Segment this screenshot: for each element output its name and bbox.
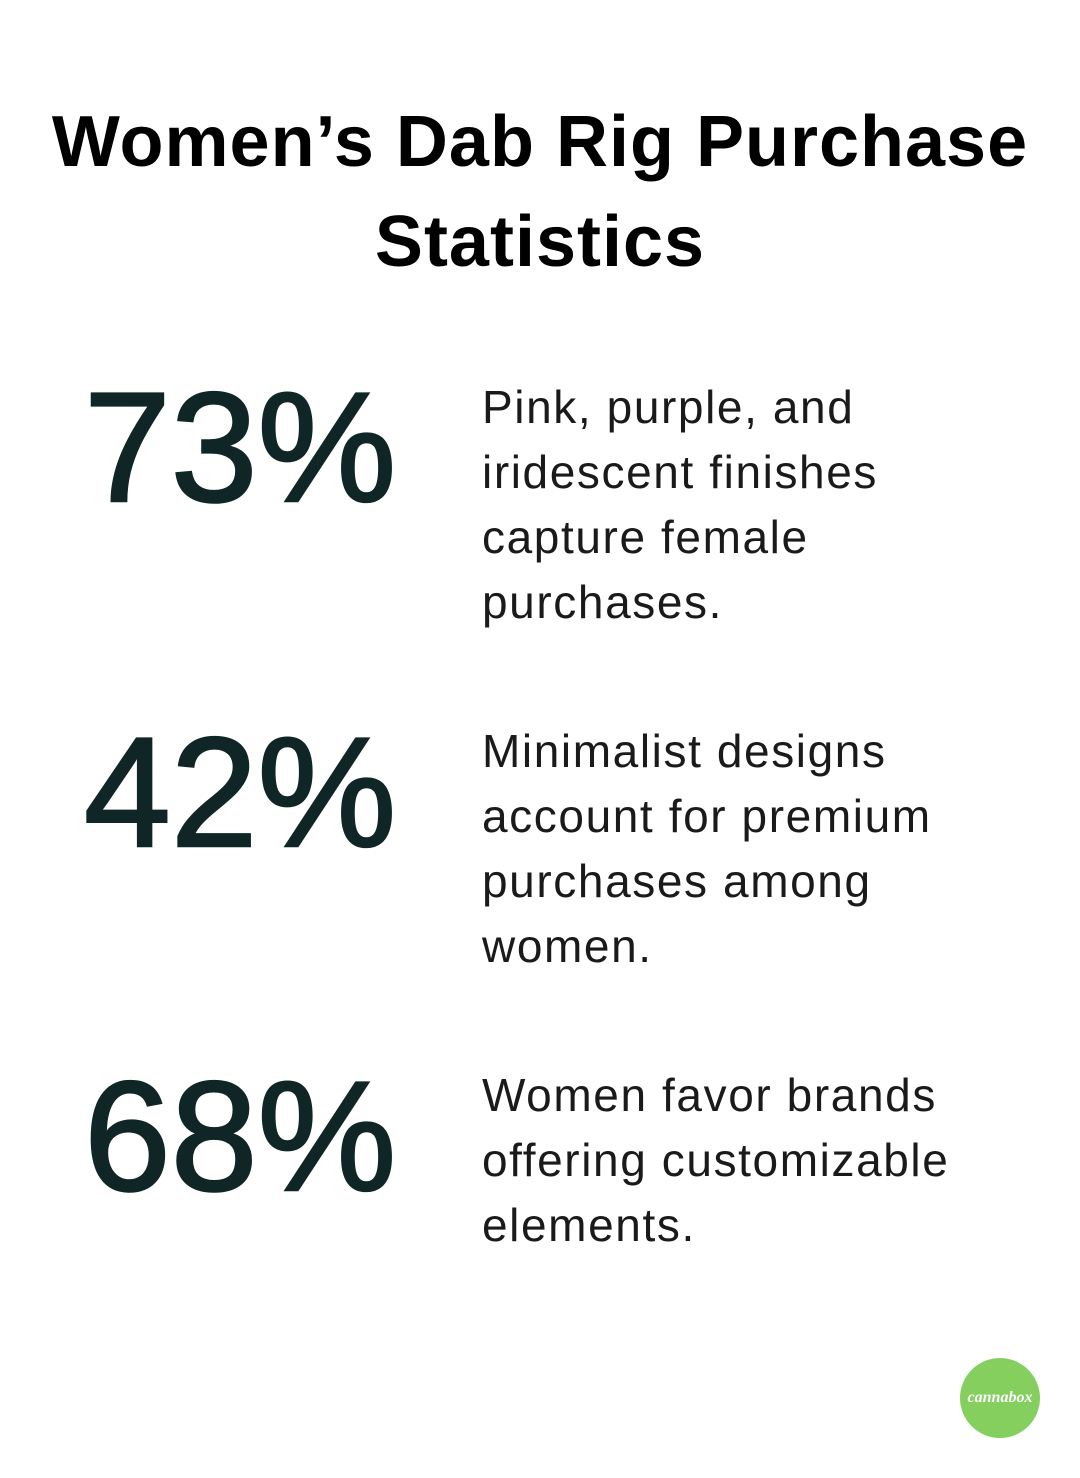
stat 2 number: 42% <box>84 706 396 880</box>
stat 1 number: 73% <box>84 361 396 535</box>
stat 3 text: Women favor brands <box>482 1069 937 1121</box>
stat 1 text: Pink, purple, and <box>482 381 854 433</box>
stat 1 text: iridescent finishes <box>482 446 878 498</box>
stat 3 text: offering customizable <box>482 1134 949 1186</box>
stat 2 text: Minimalist designs <box>482 725 887 777</box>
stat 3 number: 68% <box>84 1050 396 1224</box>
logo: cannabox: cannabox <box>968 1389 1032 1406</box>
title: Women’s Dab Rig Purchase <box>52 102 1028 182</box>
title <box>52 102 1028 282</box>
stat 2 text: purchases among <box>482 855 872 907</box>
stat 1 text <box>482 381 878 628</box>
stat 1 text: purchases. <box>482 576 723 628</box>
stat 2 text <box>482 725 932 972</box>
stat 1 text: capture female <box>482 511 809 563</box>
title: Statistics <box>375 202 705 282</box>
stat 3 text: elements. <box>482 1199 696 1251</box>
stat 2 text: account for premium <box>482 790 932 842</box>
stat 2 text: women. <box>482 920 653 972</box>
stat 3 text <box>482 1069 949 1251</box>
logo: cannabox <box>960 1358 1040 1438</box>
